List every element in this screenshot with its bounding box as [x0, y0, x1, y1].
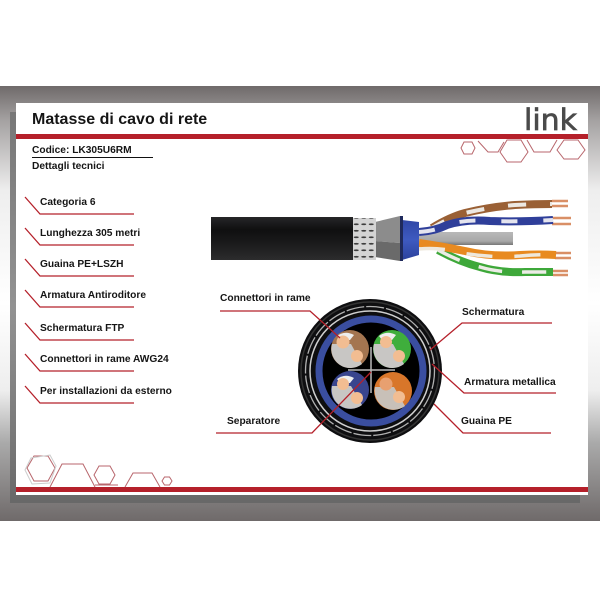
cable side view — [211, 201, 571, 275]
callout: Connettori in rame: Connettori in rame — [220, 293, 311, 304]
spec: Armatura Antiroditore: Armatura Antiroditore — [40, 290, 146, 301]
hexagon decoration: bottom left — [25, 455, 172, 487]
callout: Guaina PE: Guaina PE — [461, 416, 512, 427]
spec: Connettori in rame AWG24: Connettori in rame AWG24 — [40, 354, 169, 365]
callout: Guaina PE — [434, 404, 551, 433]
callout: Armatura metallica: Armatura metallica — [464, 377, 556, 388]
spec list — [25, 197, 172, 403]
spec: Lunghezza 305 metri — [25, 228, 140, 245]
spec: Schermatura FTP — [25, 323, 134, 340]
hexagon decoration: top right — [461, 140, 585, 162]
metal braid — [351, 218, 376, 260]
page background band — [0, 86, 600, 521]
blue pair — [331, 371, 369, 409]
callout: Connettori in rame — [220, 293, 340, 338]
callout: Armatura metallica — [432, 364, 556, 393]
green twisted pair — [438, 250, 568, 275]
brown twisted pair — [432, 201, 568, 228]
product code: Codice: LK305U6RM — [32, 145, 132, 156]
logo: link: link — [524, 103, 577, 137]
foil shield — [375, 216, 400, 261]
white panel — [16, 103, 588, 495]
callout: Separatore: Separatore — [227, 416, 281, 427]
spec: Categoria 6: Categoria 6 — [40, 197, 96, 208]
blue twisted pair — [419, 218, 571, 232]
filler core — [415, 232, 513, 245]
spec: Connettori in rame AWG24 — [25, 354, 169, 371]
spec: Armatura Antiroditore — [25, 290, 146, 307]
cable cross-section — [298, 299, 442, 443]
spec: Per installazioni da esterno: Per installazioni da esterno — [40, 386, 172, 397]
black jacket — [211, 217, 353, 260]
orange pair — [374, 372, 412, 410]
callout: Schermatura — [430, 307, 552, 350]
blue sheath flange — [400, 216, 403, 261]
callout: Separatore — [216, 372, 371, 433]
green pair — [373, 330, 411, 368]
spec: Guaina PE+LSZH — [25, 259, 134, 276]
blue sheath ring — [319, 319, 423, 423]
code underline — [32, 157, 153, 158]
spec: Schermatura FTP: Schermatura FTP — [40, 323, 125, 334]
blue inner sheath — [402, 220, 419, 260]
brown pair — [331, 330, 369, 368]
outer jacket — [298, 299, 442, 443]
cross separator — [348, 347, 395, 393]
spec: Lunghezza 305 metri: Lunghezza 305 metri — [40, 228, 140, 239]
panel shadow — [10, 112, 580, 503]
armour rings — [301, 302, 439, 440]
top red rule — [16, 134, 588, 139]
orange twisted pair — [419, 243, 571, 258]
spec: Categoria 6 — [25, 197, 134, 214]
callout: Schermatura: Schermatura — [462, 307, 525, 318]
spec: Guaina PE+LSZH: Guaina PE+LSZH — [40, 259, 124, 270]
title: Matasse di cavo di rete — [32, 111, 207, 128]
subheading: technical details: Dettagli tecnici — [32, 161, 105, 172]
spec: Per installazioni da esterno — [25, 386, 172, 403]
bottom red rule — [16, 487, 588, 492]
